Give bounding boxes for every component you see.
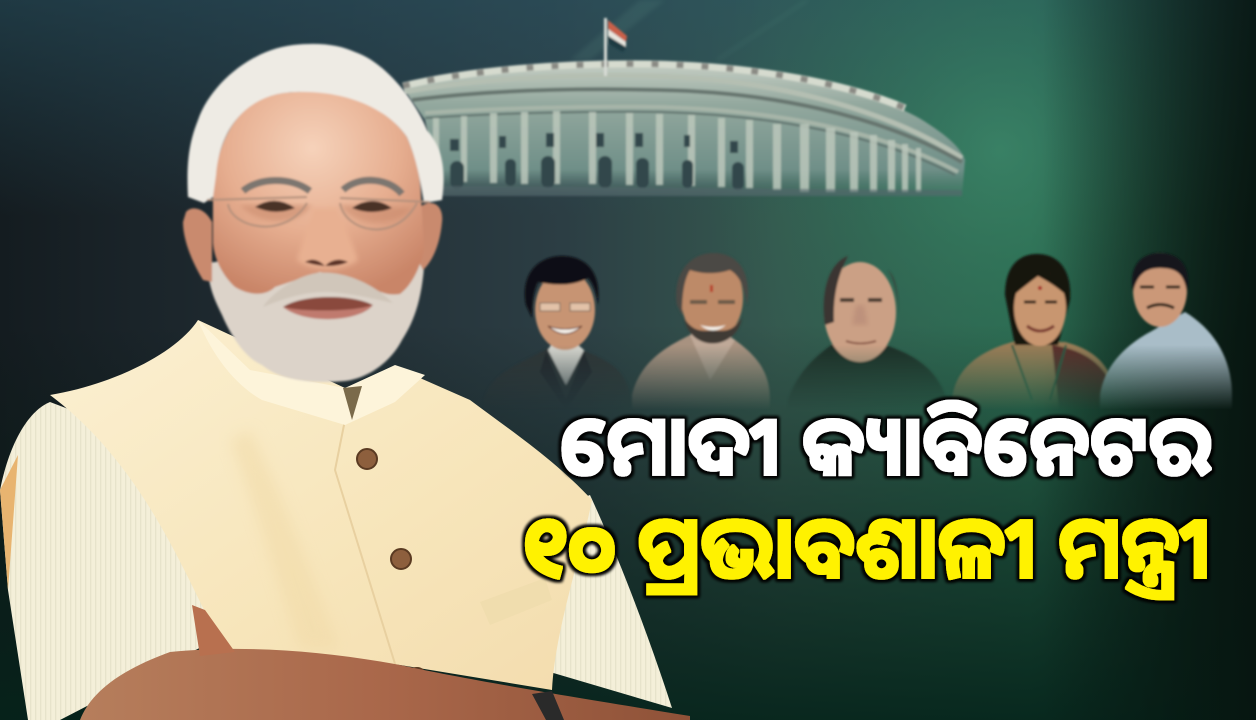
minister 4 (952, 252, 1108, 405)
eyebrows (243, 180, 402, 194)
headline line 1: ମୋଦୀ କ୍ୟାବିନେଟର (560, 399, 1212, 493)
glasses (207, 197, 430, 229)
mustache (263, 273, 393, 307)
ears (183, 208, 212, 282)
shirt sleeves (0, 402, 672, 720)
minister portraits (524, 252, 1233, 407)
minister 5 (1100, 253, 1232, 420)
main figure (0, 44, 690, 720)
head (183, 44, 444, 382)
minister 1 (524, 254, 612, 386)
minister 3 (792, 256, 944, 398)
buttons (357, 449, 426, 686)
eye shadow (240, 205, 412, 223)
nose (297, 208, 358, 269)
hair (187, 44, 444, 203)
beard (207, 247, 425, 382)
columns (433, 111, 921, 192)
collar (198, 320, 425, 425)
eyes (255, 201, 392, 212)
headline (522, 399, 1212, 600)
parliament building (403, 64, 965, 196)
face (213, 91, 424, 295)
arched windows (450, 133, 744, 190)
flag on parliament (604, 18, 627, 76)
headline line 2: ୧୦ ପ୍ରଭାବଶାଳୀ ମନ୍ତ୍ରୀ (522, 498, 1210, 600)
folded arms (80, 649, 690, 720)
minister 2 (632, 253, 770, 420)
lips (283, 297, 373, 311)
vest (50, 320, 592, 690)
